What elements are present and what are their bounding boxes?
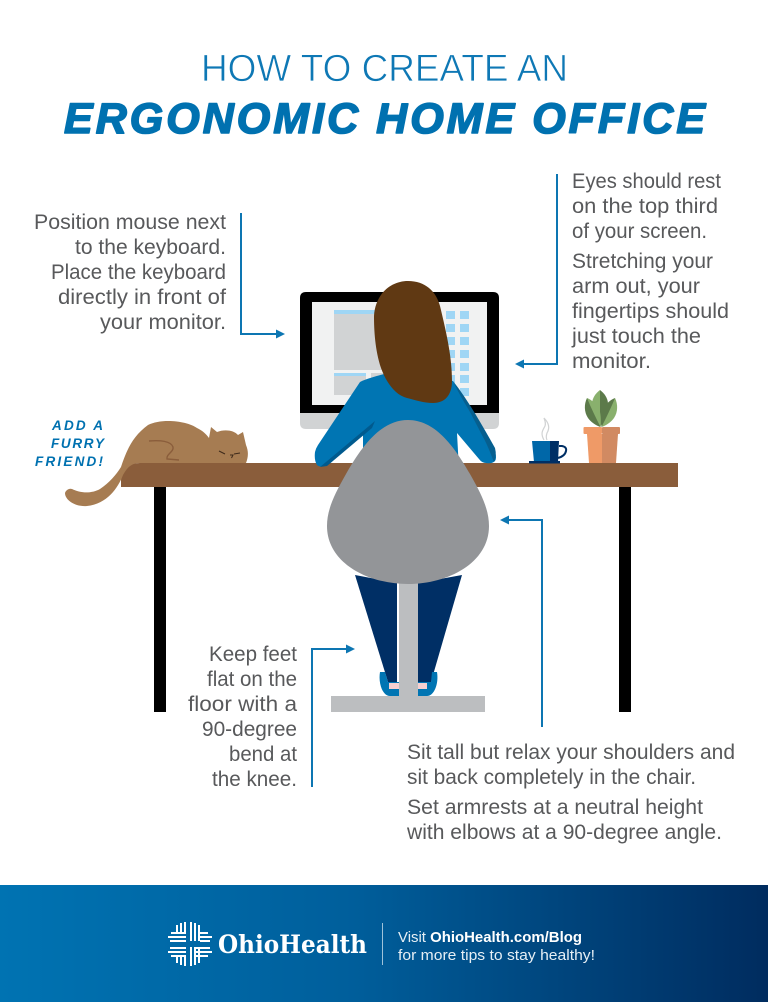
footer band bbox=[0, 885, 768, 1002]
potted plant bbox=[584, 390, 620, 463]
text block: mouse and keyboard: directly in front of bbox=[58, 285, 226, 309]
text block: eyes and monitor bbox=[571, 169, 729, 373]
footer call to action bbox=[398, 929, 595, 964]
desk bbox=[121, 463, 678, 712]
title: HOW TO CREATE AN bbox=[201, 48, 568, 90]
text block: eyes and monitor: monitor. bbox=[572, 349, 651, 373]
text block: posture and armrests: Sit tall but relax your shoulders and bbox=[407, 740, 735, 764]
cat caption: ADD A bbox=[51, 418, 103, 433]
footer call to action: Visit OhioHealth.com/Blog bbox=[398, 929, 582, 946]
cat bbox=[65, 421, 248, 506]
text block: mouse and keyboard: your monitor. bbox=[100, 310, 226, 334]
text block: mouse and keyboard: to the keyboard. bbox=[75, 235, 226, 259]
icon: OhioHealth logo bbox=[168, 922, 212, 966]
cat caption bbox=[35, 418, 106, 469]
text block: eyes and monitor: Eyes should rest bbox=[572, 169, 721, 193]
text block: feet bbox=[188, 642, 297, 791]
text block: feet: floor with a bbox=[188, 692, 297, 716]
text block: feet: flat on the bbox=[207, 667, 297, 691]
arrow: to keyboard bbox=[241, 213, 285, 338]
text block: mouse and keyboard bbox=[34, 210, 226, 334]
text block: feet: the knee. bbox=[212, 767, 297, 791]
text block: eyes and monitor: on the top third bbox=[572, 194, 718, 218]
title: ERGONOMIC HOME OFFICE bbox=[64, 95, 706, 143]
title bbox=[64, 48, 706, 143]
text block: posture and armrests bbox=[406, 740, 735, 844]
text block: eyes and monitor: just touch the bbox=[571, 324, 701, 348]
text block: posture and armrests: Set armrests at a neutral height bbox=[407, 795, 703, 819]
coffee cup bbox=[529, 418, 566, 464]
text block: feet: Keep feet bbox=[209, 642, 297, 666]
footer call to action: for more tips to stay healthy! bbox=[398, 947, 595, 964]
text block: eyes and monitor: of your screen. bbox=[572, 219, 707, 243]
cat caption: FURRY bbox=[51, 436, 106, 451]
text block: mouse and keyboard: Position mouse next bbox=[34, 210, 226, 234]
text block: eyes and monitor: arm out, your bbox=[572, 274, 700, 298]
text block: mouse and keyboard: Place the keyboard bbox=[51, 260, 226, 284]
text block: posture and armrests: with elbows at a 90-degree angle. bbox=[406, 820, 722, 844]
person bbox=[315, 281, 496, 696]
arrow: to chair bbox=[500, 516, 542, 727]
text block: feet: 90-degree bbox=[202, 717, 297, 741]
logo wordmark: OhioHealth bbox=[218, 930, 367, 959]
text block: eyes and monitor: fingertips should bbox=[572, 299, 729, 323]
monitor bbox=[300, 292, 499, 429]
text block: posture and armrests: sit back completely in the chair. bbox=[407, 765, 696, 789]
text block: feet: bend at bbox=[229, 742, 297, 766]
chair bbox=[327, 420, 489, 712]
arrow: to feet bbox=[312, 644, 355, 787]
text block: eyes and monitor: Stretching your bbox=[572, 249, 713, 273]
arrow: to monitor bbox=[515, 174, 557, 368]
cat caption: FRIEND! bbox=[35, 454, 104, 469]
